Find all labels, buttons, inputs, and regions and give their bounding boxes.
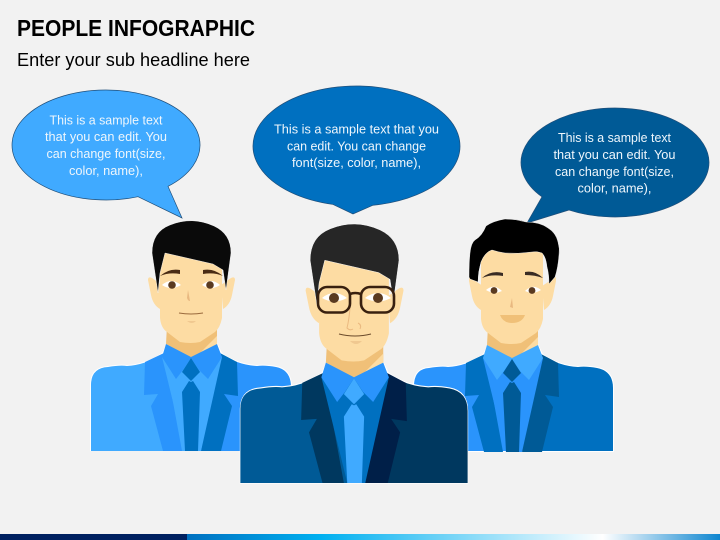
- person: centre man with glasses: [240, 224, 468, 484]
- speech bubble: right: that you can edit. You: [554, 148, 676, 162]
- speech bubble: left: that you can edit. You: [45, 130, 167, 144]
- face details: [318, 287, 394, 344]
- speech bubble: left: [12, 90, 200, 218]
- person: left man: [90, 221, 292, 451]
- speech bubble: left: can change font(size,: [46, 147, 166, 161]
- speech bubble: right: This is a sample text: [558, 131, 672, 145]
- head: [469, 219, 559, 344]
- speech bubble: right: color, name),: [578, 182, 652, 196]
- speech bubble: left: color, name),: [69, 164, 143, 178]
- head: [148, 221, 235, 343]
- title: PEOPLE INFOGRAPHIC: [17, 15, 255, 41]
- speech bubble: right: [521, 108, 709, 223]
- glasses: [318, 287, 394, 312]
- speech bubble: centre: font(size, color, name),: [292, 156, 421, 170]
- footer bar: [0, 534, 720, 540]
- speech bubble: left: This is a sample text: [50, 114, 163, 128]
- speech bubble: centre: This is a sample text that you: [274, 122, 439, 136]
- speech bubble: centre: [253, 86, 460, 214]
- suit and shirt: [240, 224, 468, 484]
- suit and shirt: [413, 326, 614, 452]
- speech bubble: centre: can edit. You can change: [287, 140, 426, 154]
- speech bubble: right: can change font(size,: [555, 165, 674, 179]
- sub headline: Enter your sub headline here: [17, 50, 250, 70]
- person: right man: [413, 219, 614, 452]
